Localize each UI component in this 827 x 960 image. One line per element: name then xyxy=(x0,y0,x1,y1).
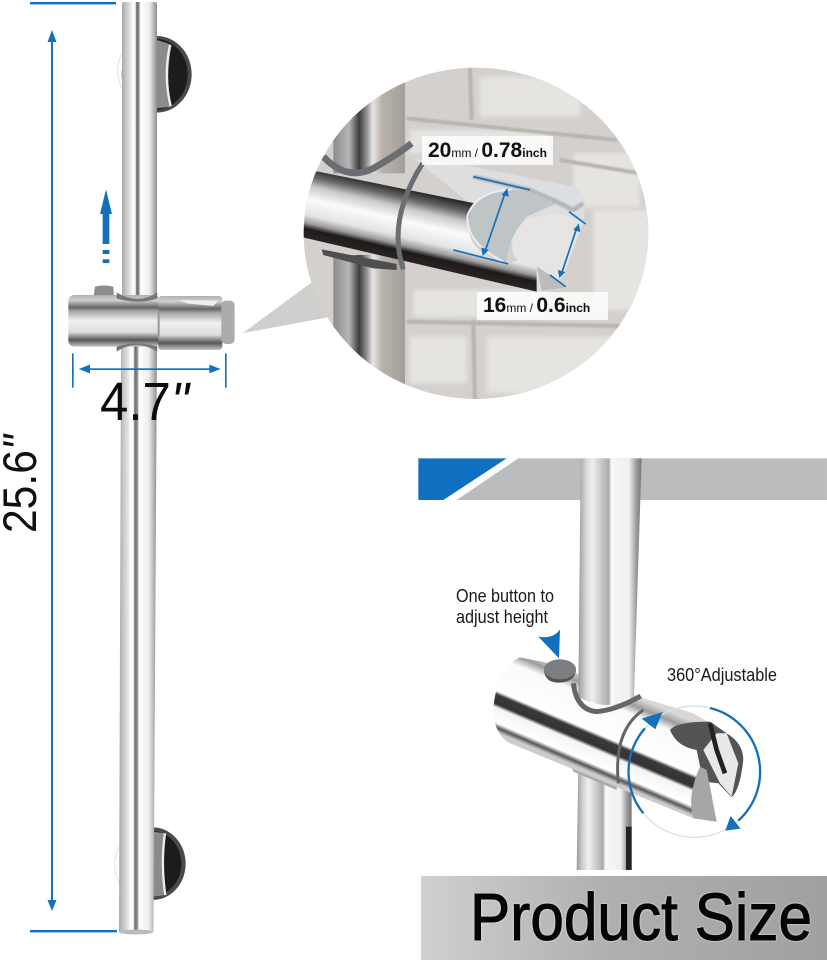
sliding clamp, side view xyxy=(68,285,235,352)
brick wall background xyxy=(300,60,653,403)
lower support tab xyxy=(322,249,397,270)
caption: one button xyxy=(456,586,554,627)
caption: 360 adjustable: 360°Adjustable xyxy=(667,665,777,685)
callout pointer xyxy=(243,282,330,333)
height dimension: 25.6 inch xyxy=(30,2,117,932)
label: 16mm / 0.6inch: 16mm / 0.6inch xyxy=(483,294,590,317)
clamp detail illustration xyxy=(493,458,760,870)
upper rail xyxy=(578,458,642,705)
section header bar xyxy=(418,458,827,500)
width dimension: 4.7 inch xyxy=(72,353,227,388)
round opening xyxy=(512,214,582,281)
upper rail section xyxy=(333,82,405,174)
vertical slide rail xyxy=(119,2,157,934)
top wall bracket xyxy=(118,36,192,113)
rubber strap xyxy=(323,143,423,269)
hole surface xyxy=(468,189,557,264)
lower rail section xyxy=(333,255,405,384)
clamp opening xyxy=(670,722,743,797)
lower rail xyxy=(577,767,632,870)
clamp chrome body xyxy=(300,171,537,292)
translucent clamp end xyxy=(413,158,585,292)
button pointer xyxy=(538,629,560,658)
caption: one button: One button to xyxy=(456,586,554,606)
label: 16mm / 0.6inch xyxy=(477,292,608,320)
width label: 4.7" xyxy=(100,372,192,432)
lower tab xyxy=(572,767,617,790)
dimension marks: 20mm xyxy=(453,177,586,287)
adjust button xyxy=(544,659,576,683)
clamp body xyxy=(493,657,727,822)
magnified detail circle xyxy=(300,60,653,403)
jaw tip xyxy=(691,767,717,822)
caption: one button: adjust height xyxy=(456,607,548,627)
rotation arrow xyxy=(629,706,760,837)
bottom wall bracket xyxy=(115,827,186,900)
rubber strap xyxy=(573,683,643,783)
lower jaw xyxy=(537,267,566,291)
up arrow xyxy=(100,189,112,263)
label: 20mm / 0.78inch: 20mm / 0.78inch xyxy=(428,139,547,162)
hole rim xyxy=(467,189,512,262)
